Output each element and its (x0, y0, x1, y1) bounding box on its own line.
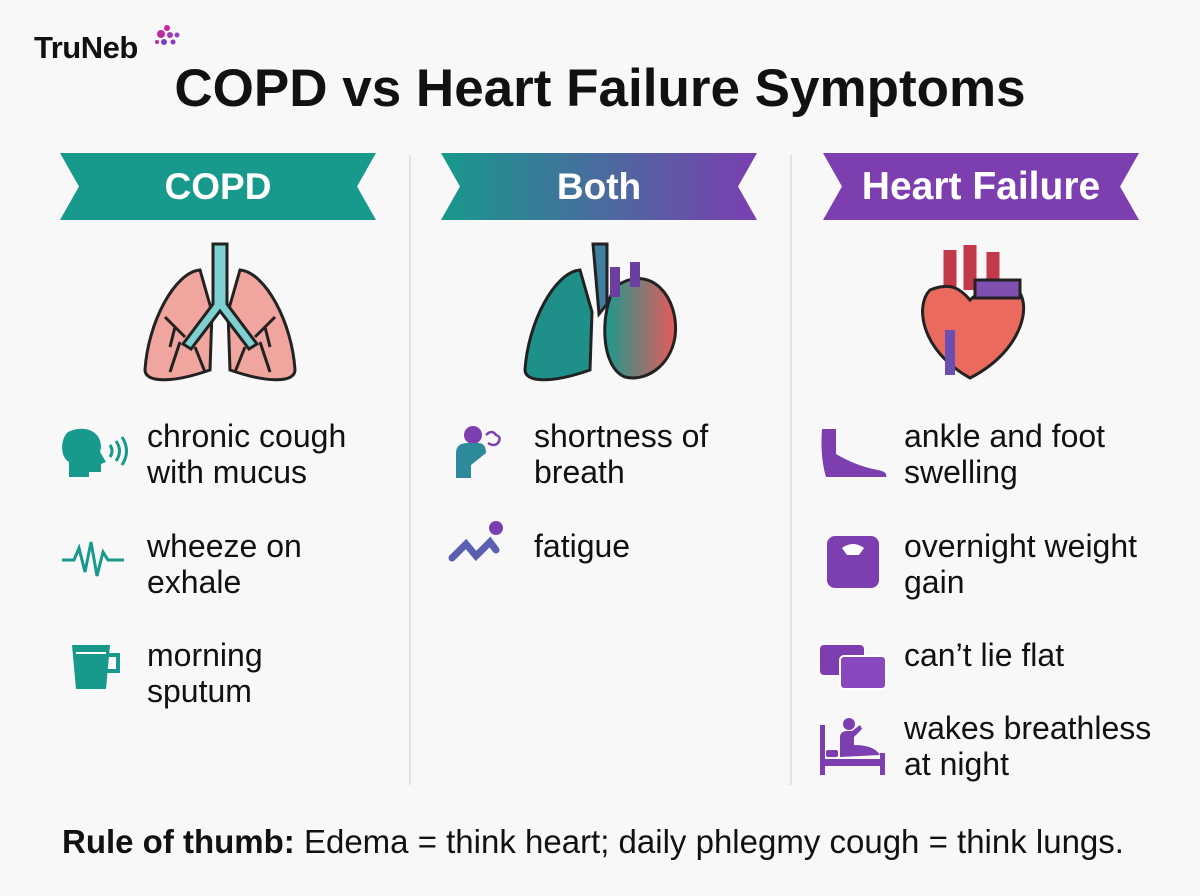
text: ankle swelling (904, 418, 1105, 490)
text: morning sputum: sputum (147, 673, 252, 709)
text: shortness of breath (534, 418, 708, 490)
text: chronic cough: with mucus (147, 454, 307, 490)
text: wheeze: wheeze on (147, 528, 302, 564)
icon: coughing head (62, 428, 128, 477)
logo: TruNeb (34, 30, 138, 65)
text: fatigue: fatigue (534, 528, 630, 564)
text: shortness of breath: breath (534, 454, 625, 490)
text: wheeze (147, 528, 302, 600)
text: ankle swelling: swelling (904, 454, 1018, 490)
icon: waveform (62, 542, 124, 576)
icon: lungs (144, 242, 296, 382)
text: wheeze: exhale (147, 564, 241, 600)
Both items (448, 418, 708, 564)
footer: rule of thumb: Rule of thumb: Edema = think heart; daily phlegmy cough = think lungs. (62, 823, 1124, 860)
text: shortness of breath: shortness of (534, 418, 708, 454)
logo (34, 25, 180, 65)
icon: short of breath person (456, 426, 501, 478)
icon: foot (822, 429, 886, 477)
icon: heart (921, 245, 1026, 380)
banner: Both (441, 153, 757, 220)
COPD items (62, 418, 346, 709)
icon: lungs and heart (524, 242, 678, 382)
banner: Heart Failure (823, 153, 1139, 220)
icon: bed (820, 718, 885, 775)
text: chronic cough: chronic cough (147, 418, 346, 454)
text: morning sputum: morning (147, 637, 263, 673)
text: can't lie flat: can’t lie flat (904, 637, 1064, 673)
title: COPD vs Heart Failure Symptoms (174, 59, 1026, 118)
text: wakes breathless (904, 710, 1151, 782)
text: weight gain (904, 528, 1137, 600)
text: wakes breathless: wakes breathless (904, 710, 1151, 746)
text: weight gain: overnight weight (904, 528, 1137, 564)
Heart Failure items (820, 418, 1151, 782)
banner: COPD: COPD (165, 166, 271, 207)
icon: mug (72, 645, 120, 689)
text: weight gain: gain (904, 564, 964, 600)
text: wakes breathless: at night (904, 746, 1009, 782)
text: ankle swelling: ankle and foot (904, 418, 1105, 454)
banner: COPD (60, 153, 376, 220)
banner: Heart Failure: Heart Failure (862, 165, 1100, 208)
icon: scale (827, 536, 879, 588)
banner: Both: Both (557, 166, 641, 207)
text: chronic cough (147, 418, 346, 490)
icon: fatigue (448, 521, 503, 562)
icon: pillows (820, 645, 885, 688)
text: morning sputum (147, 637, 263, 709)
